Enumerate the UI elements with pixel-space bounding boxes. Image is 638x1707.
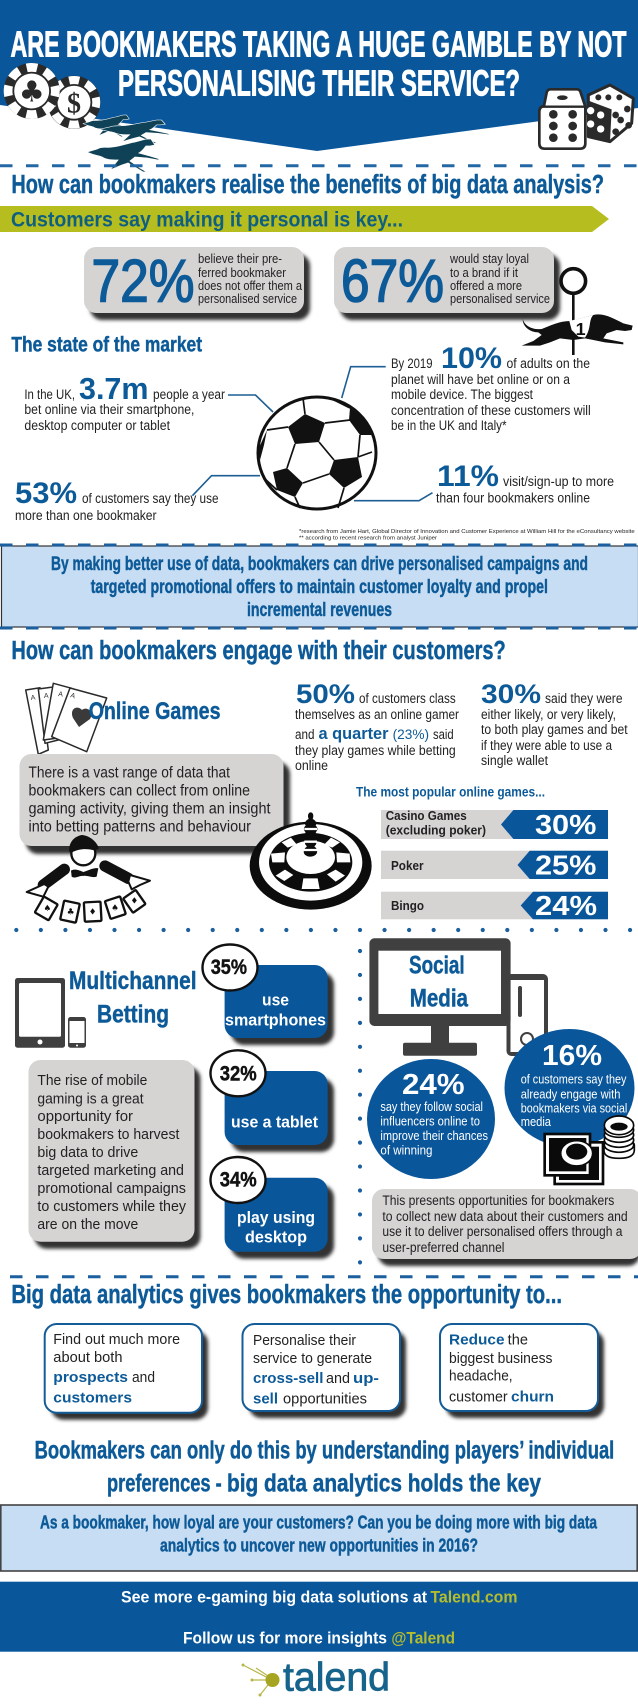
text: 67% description	[449, 252, 550, 306]
icon: croupier: ♠	[111, 904, 119, 914]
stat circle: 24%: 24%	[402, 1069, 465, 1101]
card: cross-sell and up-sell: opportunities	[283, 1392, 367, 1408]
bar chart: popular games	[381, 808, 608, 921]
card: prospects and customers: about both	[53, 1350, 122, 1366]
icon: greyhound and finish post: 1	[576, 319, 586, 339]
panel: 72% stat	[84, 247, 310, 320]
card: cross-sell and up-sell: Personalise their	[253, 1333, 356, 1349]
panel: online gaming data: into betting patterns and behaviour	[28, 819, 251, 836]
callout banner: how loyal: analytics to uncover new opportunities in 2016?	[160, 1536, 478, 1556]
stat circle: 16%: media	[521, 1115, 551, 1129]
icon: croupier	[27, 835, 150, 923]
panel: multichannel description: opportunity for	[37, 1108, 133, 1125]
stat circle: 24%	[367, 1059, 495, 1179]
icon: monitor with heading	[369, 938, 511, 1056]
icon: croupier: ♠	[43, 904, 51, 914]
callout: 10% of adults	[342, 342, 591, 433]
bar: casino games 30%: 30%	[535, 809, 597, 840]
panel: online gaming data: bookmakers can collect from online	[28, 783, 250, 800]
panel: multichannel description: bookmakers to harvest	[37, 1126, 180, 1143]
callout: 3.7m people: bet online via their smartphone,	[24, 402, 194, 417]
heading: engage with customers: How can bookmakers engage with their customers?	[11, 637, 506, 665]
heading: social media: Social	[409, 951, 465, 979]
heading: understanding players: preferences -	[107, 1470, 222, 1498]
stat: 35% use smartphones	[202, 944, 334, 1045]
text: 67% description: personalised service	[450, 292, 550, 306]
panel: multichannel description: The rise of mobile	[37, 1072, 147, 1089]
green arrow banner	[0, 206, 609, 232]
callout: 11% visit	[354, 460, 614, 506]
panel: multichannel description: big data to drive	[37, 1144, 138, 1161]
stat: 32% use a tablet	[210, 1050, 334, 1152]
callout: 10% of adults: be in the UK and Italy*	[391, 418, 507, 433]
heading: understanding players: big data analytics holds the key	[227, 1470, 541, 1498]
text: 50% of customers: they play games while betting	[295, 743, 456, 758]
callout: 53% of customers	[15, 476, 260, 523]
bar: casino games 30%: Casino Games	[386, 808, 467, 823]
footer band: Follow us for more insights	[183, 1628, 387, 1647]
panel: multichannel description: are on the move	[37, 1216, 138, 1233]
callout: 3.7m people: 3.7m	[79, 371, 148, 406]
heading: most popular online games: The most popular online games...	[356, 784, 545, 800]
text: 50% of customers: of customers class	[359, 691, 456, 706]
callout: 53% of customers: 53%	[15, 477, 77, 510]
text: 72% description: ferred bookmaker	[198, 266, 286, 280]
icon: roulette wheel	[250, 812, 372, 910]
text: 30% single wallet: if they were able to use a	[481, 738, 612, 753]
callout: 10% of adults: planet will have bet online or on a	[391, 372, 570, 387]
panel: 67% stat	[334, 247, 560, 320]
icon: cards and poker chips	[545, 1116, 634, 1184]
callout banner: use of data: incremental revenues	[247, 600, 392, 621]
text: 72% description: believe their pre-	[198, 252, 282, 266]
footer band: Talend.com	[430, 1587, 518, 1606]
panel: 67% stat: 67%	[341, 248, 444, 315]
footnotes	[299, 529, 635, 542]
callout: 3.7m people	[24, 371, 273, 433]
bar: bingo 24%: Bingo	[391, 898, 424, 913]
callout: 3.7m people: In the UK,	[24, 387, 75, 402]
text: 50% of customers: (23%)	[393, 727, 429, 742]
card: cross-sell and up-sell	[242, 1324, 406, 1418]
heading: multichannel betting: Multichannel	[69, 967, 196, 995]
icon: playing cards: A	[30, 694, 36, 702]
stat: 32% use a tablet: use a tablet	[231, 1113, 318, 1132]
card: reduce churn: headache,	[449, 1369, 513, 1385]
icon: club chip: ♣	[19, 74, 45, 108]
stat circle: 16%	[504, 1029, 634, 1147]
heading: multichannel betting: Betting	[97, 1001, 169, 1029]
footer band: See more e-gaming big data solutions at	[121, 1587, 427, 1606]
card: cross-sell and up-sell: cross-sell	[253, 1370, 323, 1387]
text: 67% description: offered a more	[450, 279, 522, 293]
panel: multichannel description: to customers while they	[37, 1198, 186, 1215]
icon: dollar chip: $	[67, 88, 81, 120]
stat: 34% play using desktop	[210, 1157, 334, 1259]
panel: online gaming data: There is a vast range of data that	[28, 765, 231, 782]
bar: poker 25%: 25%	[535, 849, 597, 880]
card: reduce churn: customer	[449, 1390, 508, 1406]
callout: 11% visit: than four bookmakers online	[436, 491, 590, 506]
card: cross-sell and up-sell: and	[326, 1371, 350, 1387]
text: 67% description: would stay loyal	[449, 252, 529, 266]
bar: poker 25%	[381, 849, 608, 880]
panel: multichannel description: gaming is a great	[37, 1090, 144, 1107]
heading: understanding players	[35, 1436, 614, 1498]
stat: 34% play using desktop: desktop	[245, 1228, 307, 1247]
icon: playing cards: A	[58, 691, 64, 699]
card: prospects and customers: and	[132, 1370, 155, 1386]
text: 30% single wallet	[481, 679, 628, 768]
card: prospects and customers	[45, 1324, 208, 1420]
icon: dollar chip	[48, 76, 100, 129]
callout: 10% of adults: mobile device. The biggest	[391, 387, 533, 402]
icon: dice	[539, 85, 633, 149]
callout: 53% of customers: of customers say they use	[82, 491, 218, 506]
callout: 3.7m people: people a year	[153, 387, 225, 402]
text: 50% of customers: online	[295, 758, 328, 773]
callout: 11% visit: 11%	[437, 460, 499, 493]
heading: multichannel betting	[69, 967, 196, 1029]
text: 72% description: personalised service	[198, 292, 297, 306]
icon: racing horses	[83, 115, 170, 172]
icon: tower computer	[506, 974, 548, 1056]
header banner	[0, 0, 638, 151]
callout banner: how loyal	[1, 1505, 637, 1571]
icon: playing cards: A	[69, 692, 76, 700]
footer band: @Talend	[391, 1628, 455, 1647]
icon: croupier: ♦	[130, 897, 138, 907]
footer band	[0, 1582, 638, 1652]
stat: 35% use smartphones: smartphones	[225, 1011, 326, 1030]
callout: 3.7m people: desktop computer or tablet	[24, 418, 170, 433]
card: cross-sell and up-sell: service to generate	[253, 1351, 372, 1367]
stat: 35% use smartphones: use	[262, 991, 289, 1010]
text: 50% of customers: themselves as an online gamer	[295, 707, 459, 722]
icon: tablet and phone	[15, 978, 86, 1048]
text: 30% single wallet: said they were	[545, 691, 622, 706]
callout: 11% visit: visit/sign-up to more	[503, 474, 614, 489]
callout banner: use of data	[0, 545, 638, 628]
panel: online gaming data: gaming activity, giving them an insight	[28, 801, 271, 818]
card: reduce churn: biggest business	[449, 1351, 552, 1367]
heading: social media: Media	[410, 985, 469, 1013]
heading: online games: Online Games	[89, 698, 220, 725]
callout: 10% of adults: 10%	[441, 342, 502, 375]
callout: 10% of adults: of adults on the	[506, 356, 590, 371]
panel: online gaming data	[20, 754, 290, 854]
text: 72% description: does not offer them a	[198, 279, 302, 293]
footnotes: ** according to recent research from analyst Juniper	[299, 536, 437, 542]
stat circle: 24%: of winning	[380, 1143, 433, 1157]
icon: greyhound and finish post	[522, 269, 633, 355]
panel: social opportunities: This presents opportunities for bookmakers	[382, 1193, 615, 1208]
text: 50% of customers: and	[295, 727, 314, 742]
text: 67% description: to a brand if it	[450, 266, 518, 280]
card: prospects and customers: prospects	[53, 1369, 128, 1386]
icon: playing cards	[26, 683, 107, 754]
stat: 35% use smartphones: 35%	[211, 956, 247, 979]
stat circle: 24%: influencers online to	[380, 1115, 480, 1129]
text: 30% single wallet: 30%	[481, 679, 541, 709]
title	[10, 24, 626, 104]
stat: 34% play using desktop: play using	[237, 1208, 315, 1227]
card: reduce churn	[440, 1324, 604, 1418]
card: cross-sell and up-sell: sell	[253, 1391, 278, 1408]
icon: club chip	[4, 63, 60, 119]
text: 50% of customers	[295, 679, 459, 773]
bar: bingo 24%	[381, 890, 608, 921]
callout: 53% of customers: more than one bookmaker	[15, 508, 157, 523]
stat circle: 24%: say they follow social	[380, 1100, 483, 1114]
stat circle: 16%: 16%	[542, 1040, 602, 1072]
card: reduce churn: the	[508, 1333, 528, 1349]
card: cross-sell and up-sell: up-	[353, 1370, 379, 1387]
card: reduce churn: Reduce	[449, 1332, 504, 1349]
panel: 72% stat: 72%	[92, 248, 194, 315]
icon: football	[258, 397, 376, 509]
text: 72% description	[198, 252, 302, 306]
card: prospects and customers: Find out much more	[53, 1332, 180, 1348]
callout: 10% of adults: By 2019	[391, 356, 432, 371]
text: 30% single wallet: either likely, or very likely,	[481, 707, 616, 722]
icon: croupier: ♣	[67, 908, 75, 918]
stat circle: 24%: improve their chances	[380, 1129, 488, 1143]
bar: casino games 30%: (excluding poker)	[386, 823, 486, 838]
text: 50% of customers: 50%	[296, 679, 355, 709]
panel: social opportunities	[372, 1189, 638, 1266]
icon: croupier: ♦	[89, 908, 97, 918]
logo: talend: talend	[283, 1656, 390, 1700]
panel: social opportunities: user-preferred channel	[382, 1240, 504, 1255]
bar: bingo 24%: 24%	[535, 890, 597, 921]
card: reduce churn: churn	[511, 1389, 554, 1406]
text: 50% of customers: a quarter	[318, 725, 389, 743]
bar: poker 25%: Poker	[391, 858, 424, 873]
footnotes: *research from Jamie Hart, Global Director of Innovation and Customer Experience at William Hill for the eConsultancy website	[299, 529, 635, 535]
green arrow banner: Customers say making it personal is key...	[11, 208, 403, 232]
panel: multichannel description: promotional campaigns	[37, 1180, 186, 1197]
panel: multichannel description: targeted marketing and	[37, 1162, 184, 1179]
text: 30% single wallet: single wallet	[481, 753, 548, 768]
panel: multichannel description	[28, 1060, 200, 1249]
heading: social media	[409, 951, 469, 1013]
icon: playing cards: A	[44, 693, 49, 700]
stat: 34% play using desktop: 34%	[220, 1169, 257, 1192]
callout: 10% of adults: concentration of these customers will	[391, 403, 591, 418]
stat: 32% use a tablet: 32%	[220, 1063, 257, 1086]
heading: the state of the market: The state of the market	[11, 333, 202, 357]
text: 50% of customers: said	[433, 727, 454, 742]
bar: casino games 30%	[381, 808, 608, 840]
card: prospects and customers: customers	[53, 1390, 132, 1407]
stat circle: 16%: already engage with	[521, 1087, 620, 1101]
